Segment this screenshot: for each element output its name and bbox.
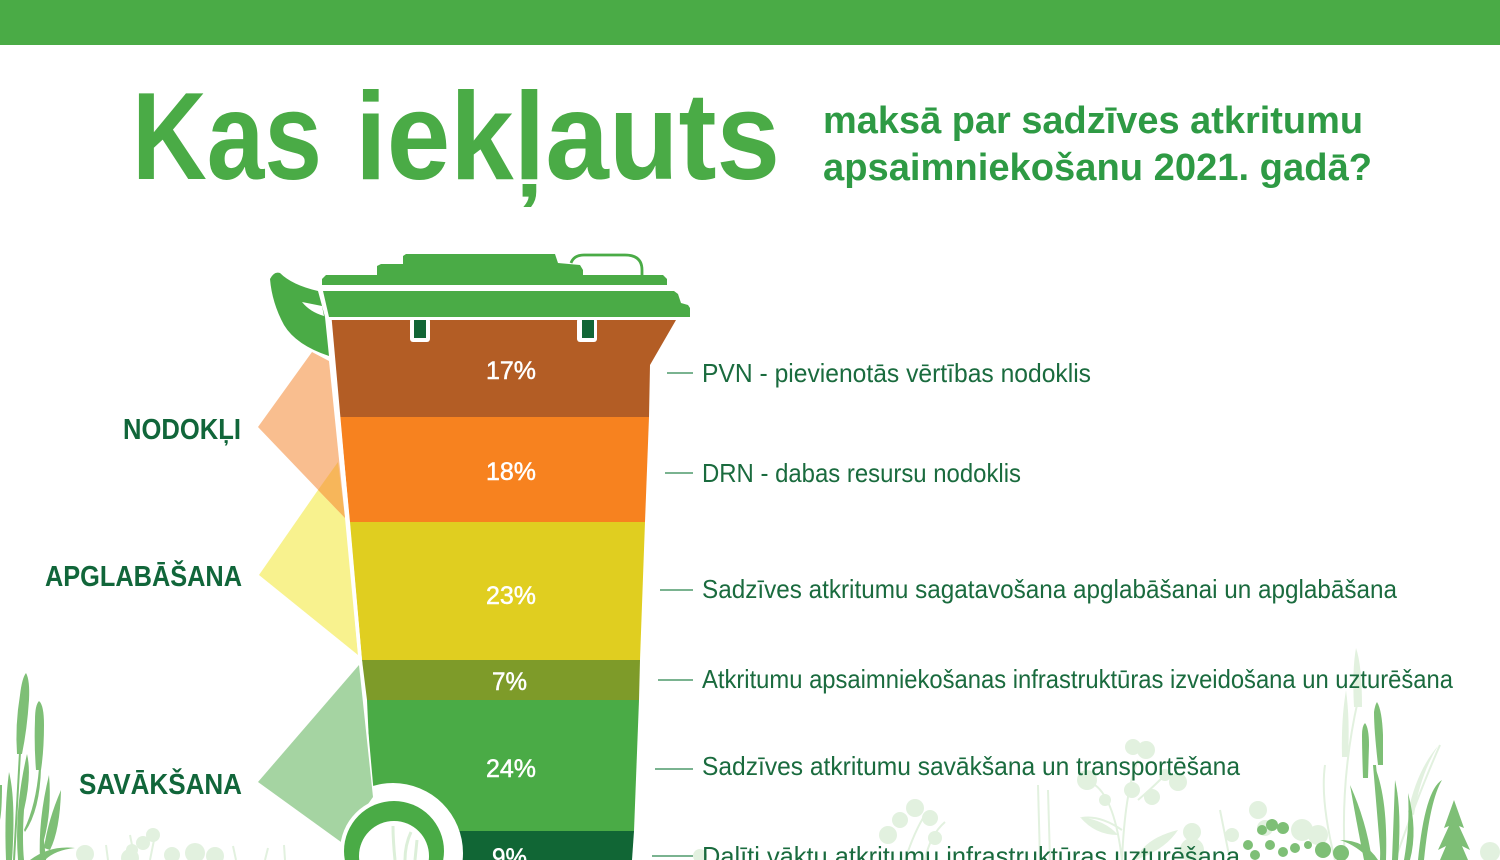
wheel (340, 797, 448, 860)
bin segment: 18% (340, 417, 649, 522)
cost item labels: PVN - pievienotās vērtības nodoklis (702, 358, 1091, 388)
top banner (0, 0, 1500, 45)
foreground plants: right (1243, 702, 1470, 860)
bin segment: 24% (367, 700, 639, 831)
upper lid (322, 254, 667, 285)
bin segment: 7% (362, 660, 640, 700)
percentages: 17% (486, 357, 536, 385)
percentages: 23% (486, 582, 536, 610)
category labels: NODOKĻI (123, 414, 241, 446)
wedge overlap (318, 462, 345, 518)
category labels (45, 414, 242, 801)
percentages: 24% (486, 755, 536, 783)
bin left edge (330, 320, 378, 860)
leader lines (652, 373, 693, 856)
category wedge: nodokļi (258, 352, 345, 518)
subtitle: apsaimniekošanu 2021. gadā? (823, 147, 1372, 189)
title (132, 68, 780, 207)
percentages: 7% (492, 668, 527, 696)
percentages (486, 357, 536, 860)
back handle (270, 273, 329, 356)
category labels: APGLABĀŠANA (45, 559, 242, 593)
bin segment: 9% (373, 831, 634, 860)
bin segment: 17% (331, 320, 676, 417)
plants in wheel (393, 826, 417, 860)
waste bin (270, 254, 690, 860)
lower lid (323, 291, 690, 317)
category wedge: apglabāšana (259, 490, 358, 655)
foreground plants: left (0, 673, 75, 860)
subtitle: maksā par sadzīves atkritumu (823, 100, 1363, 142)
lid handle (571, 255, 642, 275)
bin clip left (410, 318, 430, 342)
bin segment: 23% (350, 522, 645, 660)
category labels: SAVĀKŠANA (79, 767, 242, 801)
cost item labels: Atkritumu apsaimniekošanas infrastruktūras izveidošana un uzturēšana (702, 664, 1453, 694)
title: iekļauts (355, 68, 780, 207)
title: Kas (132, 68, 322, 206)
subtitle (823, 100, 1372, 189)
category wedge: savākšana (258, 665, 373, 842)
cost item labels (702, 358, 1453, 860)
wheel backing (323, 783, 463, 860)
bin clip right (577, 318, 597, 342)
cost item labels: Sadzīves atkritumu sagatavošana apglabāšanai un apglabāšana (702, 574, 1397, 604)
cost item labels: Sadzīves atkritumu savākšana un transportēšana (702, 751, 1240, 781)
faint background plants (76, 648, 1500, 860)
cost item labels: DRN - dabas resursu nodoklis (702, 458, 1021, 488)
percentages: 18% (486, 458, 536, 486)
